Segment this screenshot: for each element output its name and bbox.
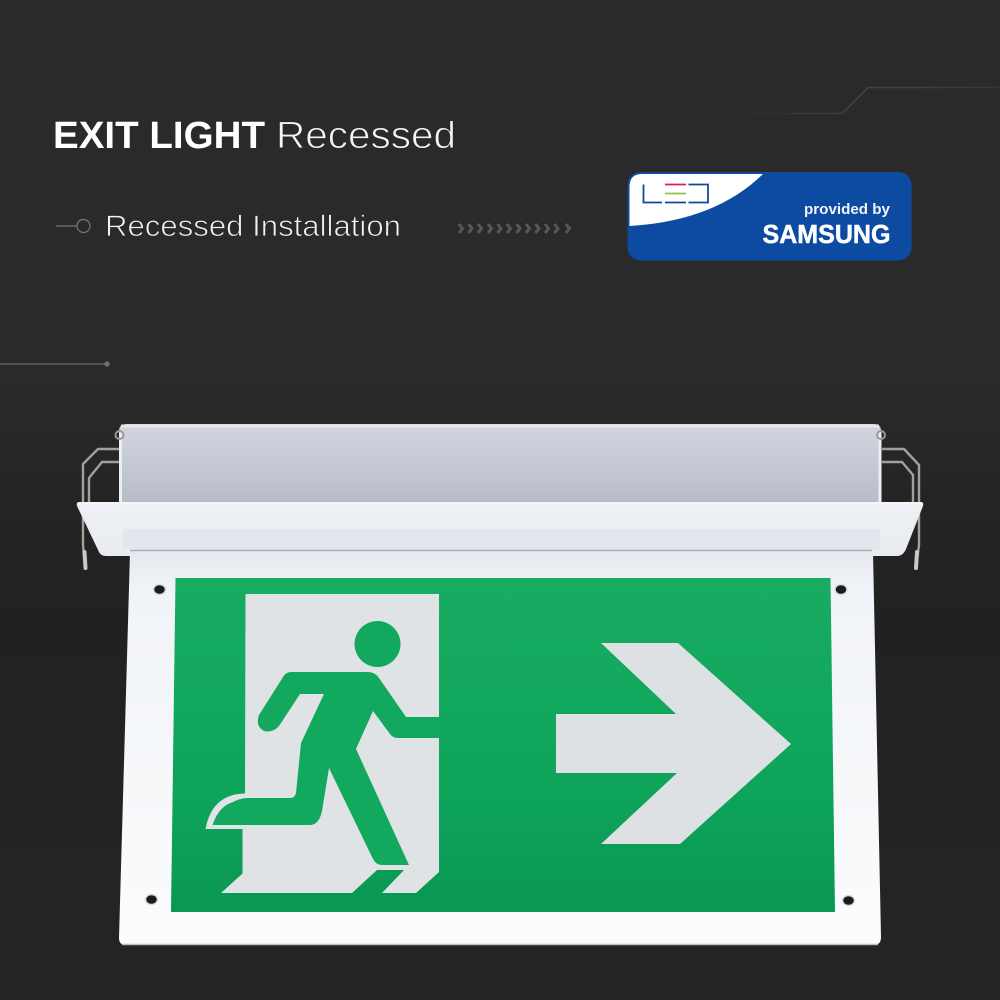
icon: line and circle bullet <box>56 220 90 232</box>
feature text: Recessed Installation <box>105 210 401 243</box>
decorative line with dot: left <box>0 361 110 367</box>
direction arrow <box>556 643 791 844</box>
decorative line: top right <box>737 88 1000 114</box>
Samsung wordmark: SAMSUNG <box>762 219 890 249</box>
plate bottom edge <box>122 944 878 946</box>
title: Recessed <box>276 115 456 157</box>
green sign face <box>171 578 835 912</box>
mounting holes <box>146 584 854 906</box>
title: EXIT LIGHT <box>53 115 265 157</box>
recessed housing box <box>116 424 885 502</box>
icon: chevron row <box>459 224 570 233</box>
title <box>53 115 456 157</box>
wire clip tips <box>84 552 917 568</box>
exit light product <box>77 424 923 945</box>
figure head <box>354 621 400 667</box>
front flange <box>77 502 923 556</box>
LED logo <box>644 184 708 202</box>
figure body <box>212 672 439 865</box>
feature line: recessed installation <box>56 210 401 243</box>
badge background <box>628 172 912 260</box>
white sign plate <box>119 552 881 945</box>
right wire clips <box>882 449 919 568</box>
badge white corner <box>630 174 763 226</box>
running figure <box>212 621 439 865</box>
exit door panel <box>206 594 439 893</box>
provided by: provided by <box>804 202 890 218</box>
badge: LED provided by Samsung <box>628 172 912 260</box>
left wire clips <box>83 449 120 568</box>
